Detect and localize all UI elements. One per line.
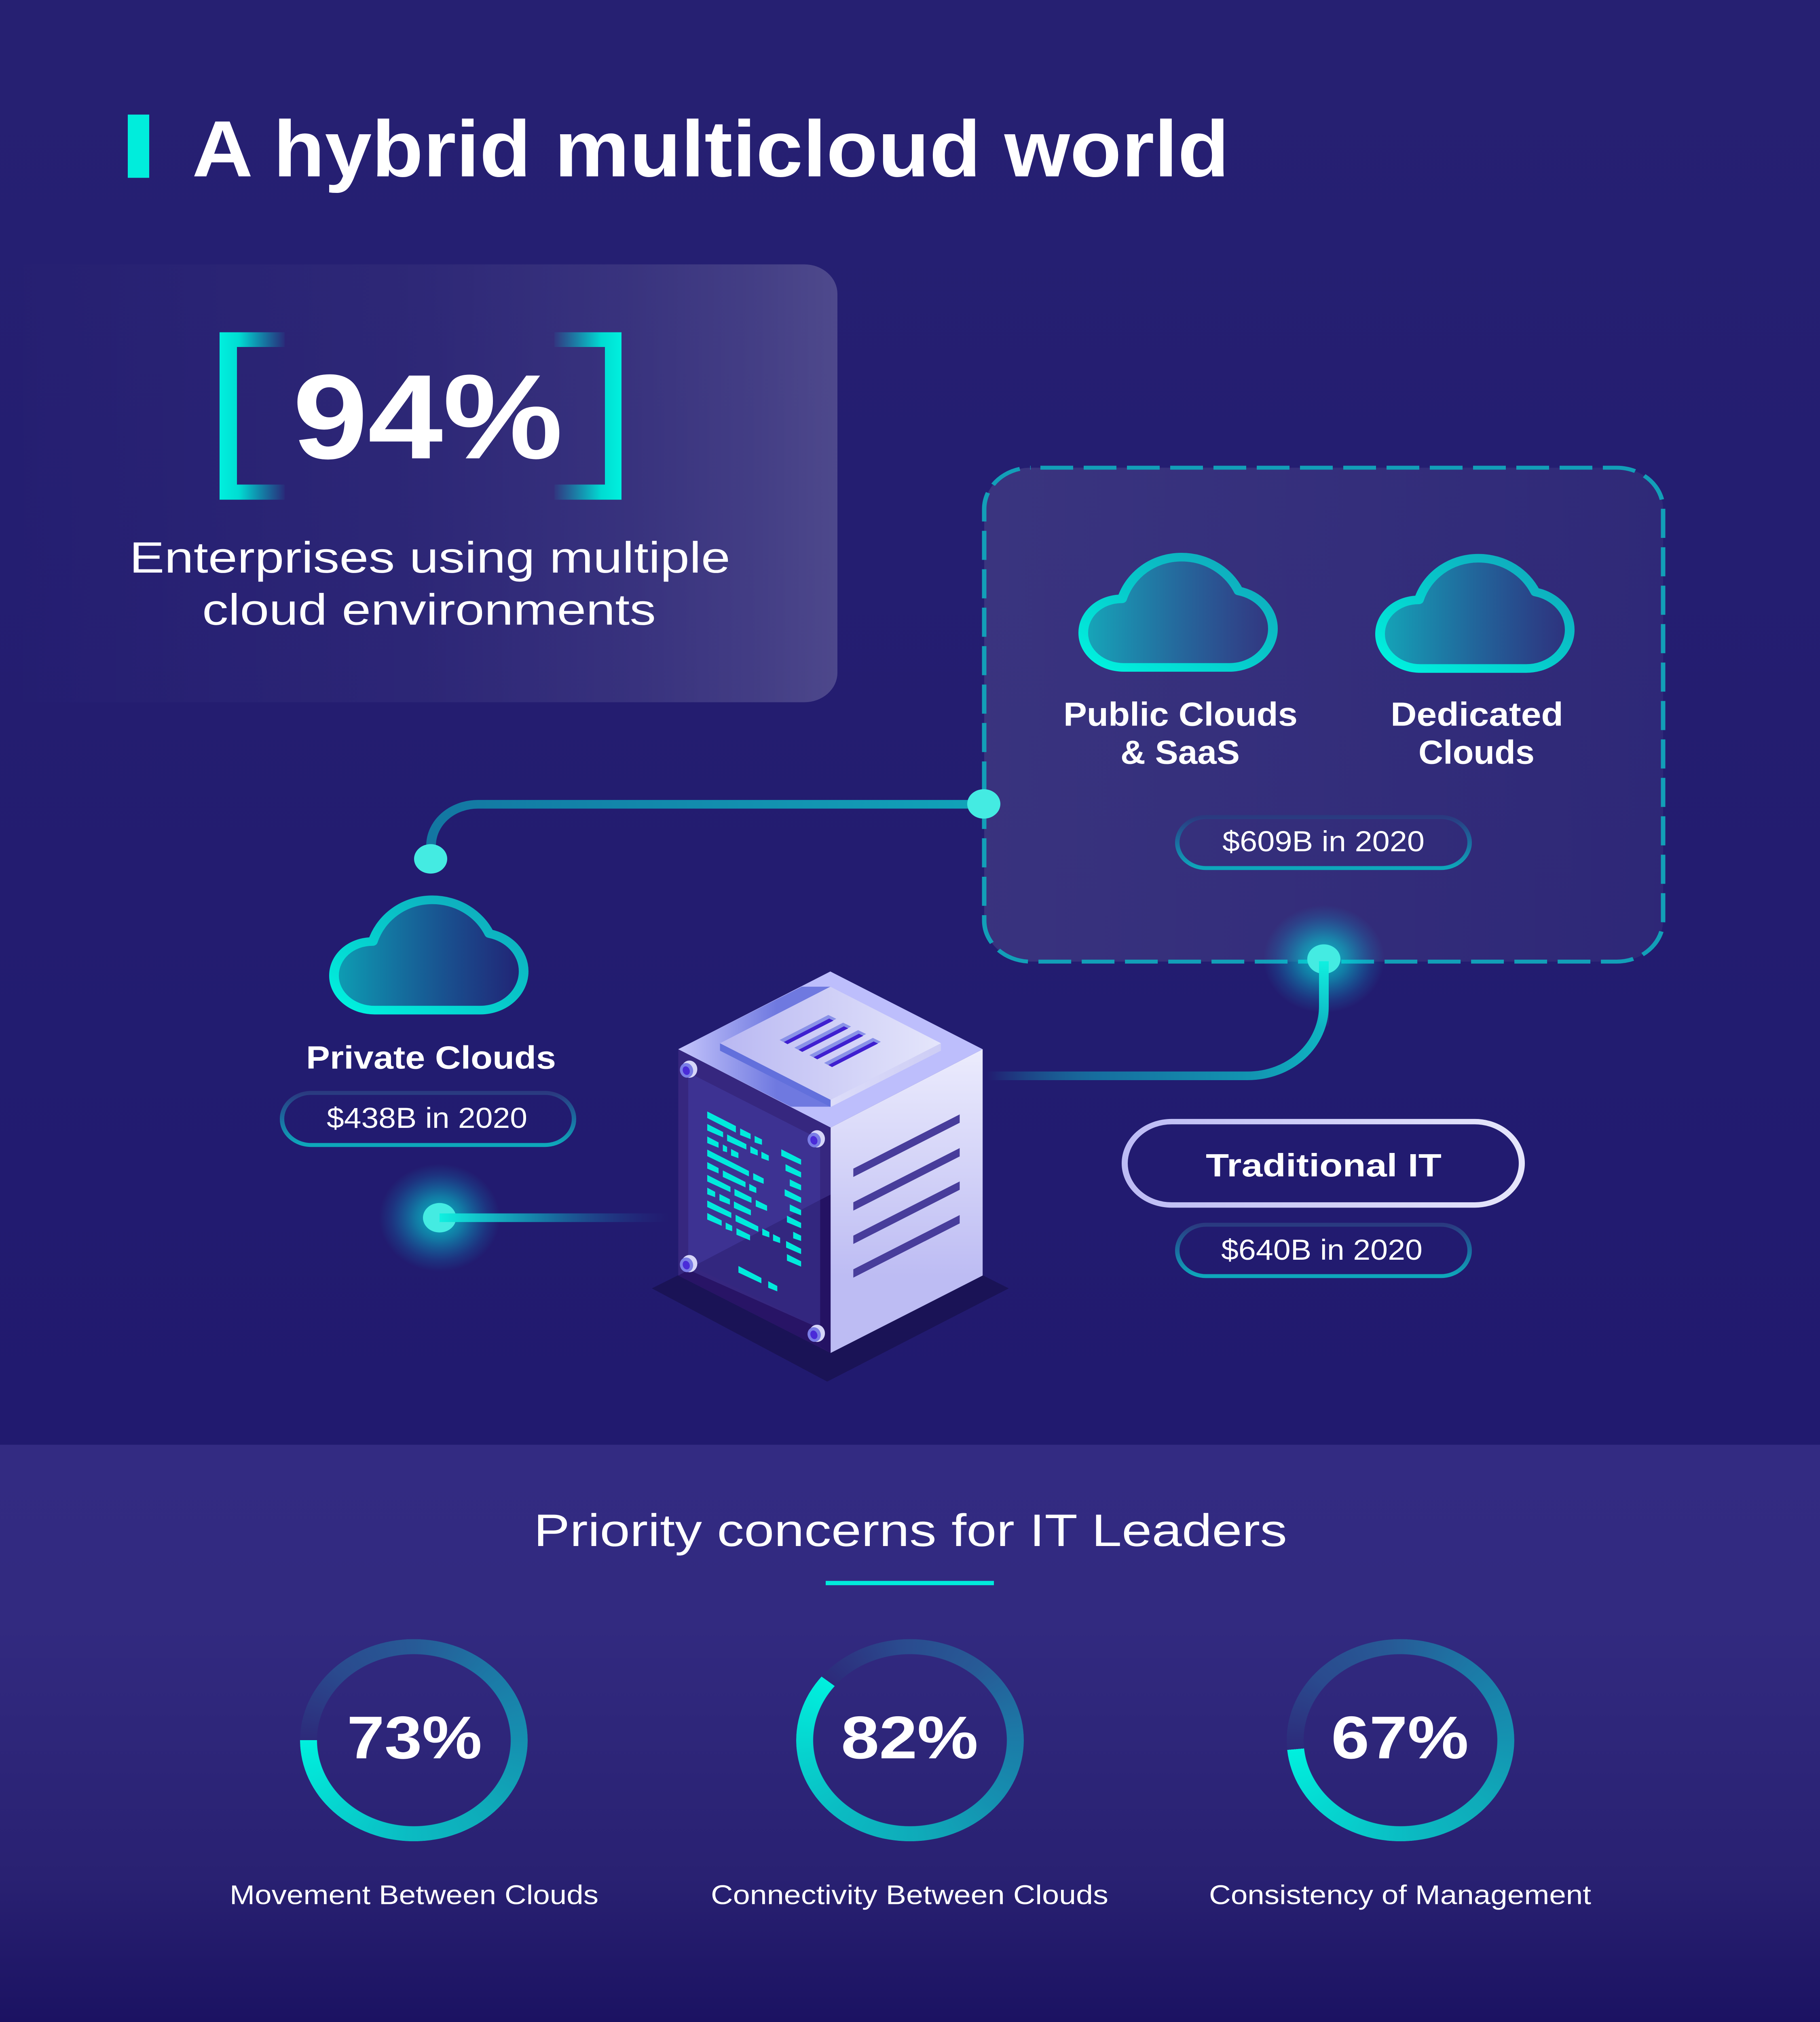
connector dot: box end [967, 789, 1000, 819]
stat description line 2: cloud environments [202, 586, 656, 634]
label: and SaaS: & SaaS [1120, 733, 1240, 771]
server side panel [831, 1049, 983, 1353]
background: lower section [0, 1445, 1820, 2022]
ring: 82 percent [796, 1639, 1024, 1841]
icon: public cloud [1083, 557, 1273, 667]
server top [678, 971, 983, 1127]
server bolt bottom right [805, 1325, 825, 1344]
server front panel [678, 1049, 831, 1353]
pill text: 609B: $609B in 2020 [1222, 826, 1425, 858]
label: traditional IT: Traditional IT [1206, 1148, 1442, 1184]
label: private clouds: Private Clouds [306, 1040, 556, 1076]
server status bars [707, 1111, 801, 1291]
connector dot: private cloud end [414, 844, 447, 874]
pill: 609B [1177, 817, 1469, 868]
label: consistency of management: Consistency of Management [1209, 1880, 1591, 1910]
glow: private node [379, 1164, 500, 1271]
section heading: Priority concerns for IT Leaders [534, 1505, 1287, 1556]
title accent bar [128, 114, 149, 178]
label: connectivity between clouds: Connectivity Between Clouds [711, 1880, 1108, 1910]
heading underline [826, 1581, 994, 1585]
panel: public and dedicated clouds [984, 468, 1663, 962]
ring: 67 percent [1287, 1639, 1514, 1841]
connector: server to box [987, 961, 1324, 1076]
connector: private node to server [440, 1214, 670, 1222]
value: 82 percent: 82% [841, 1704, 978, 1771]
server bolt bottom left [678, 1255, 697, 1275]
icon: private cloud [334, 900, 524, 1010]
icon: dedicated cloud [1380, 558, 1570, 668]
pill: traditional IT [1125, 1122, 1522, 1205]
server illustration [652, 971, 1009, 1381]
server bolt top right [805, 1130, 825, 1150]
panel: 94% stat [0, 264, 837, 702]
node dot: box bottom [1307, 944, 1340, 974]
pill text: 640B: $640B in 2020 [1221, 1234, 1423, 1266]
value: 67 percent: 67% [1331, 1704, 1469, 1771]
value: 73 percent: 73% [347, 1704, 482, 1771]
stat value: 94% [293, 350, 563, 484]
bracket right [554, 332, 621, 500]
glow: box bottom node [1263, 905, 1385, 1013]
stat description line 1: Enterprises using multiple [129, 533, 730, 582]
connector highlight [1319, 961, 1329, 1027]
label: movement between clouds: Movement Between Clouds [230, 1880, 598, 1910]
server bolt top left [678, 1060, 697, 1080]
pill text: 438B: $438B in 2020 [327, 1102, 527, 1134]
label: dedicated: Dedicated [1391, 695, 1563, 733]
background: upper section [0, 0, 1820, 1445]
pill: 438B [282, 1093, 574, 1145]
node dot: private [423, 1203, 456, 1233]
ring: 73 percent [300, 1639, 528, 1841]
bracket left [220, 332, 285, 500]
connector: box to private cloud [431, 804, 984, 859]
label: clouds: Clouds [1418, 733, 1535, 771]
server vents [780, 1015, 881, 1067]
title: A hybrid multicloud world [192, 105, 1229, 193]
server shadow [652, 1199, 1009, 1381]
pill: 640B [1177, 1225, 1469, 1276]
label: public clouds: Public Clouds [1063, 695, 1298, 733]
